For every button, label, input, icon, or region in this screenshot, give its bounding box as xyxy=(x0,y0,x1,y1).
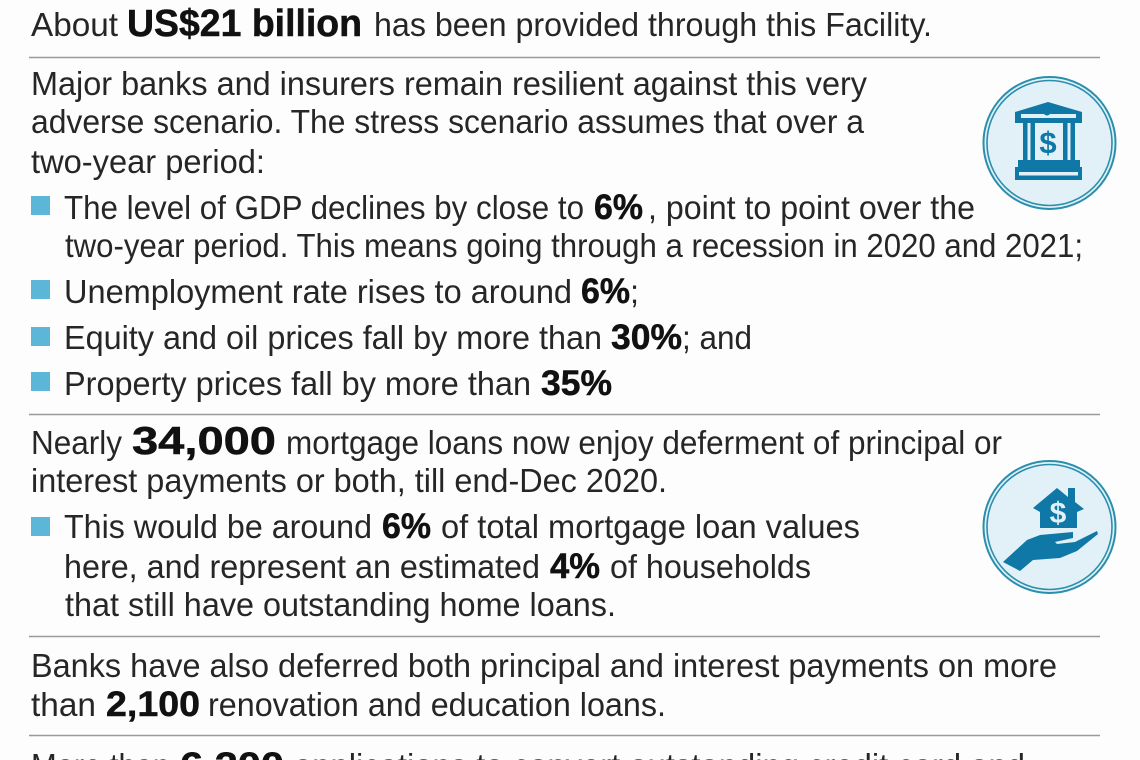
bullet: share of mortgage loans: here, and represent an estimated xyxy=(64,548,540,585)
text block: facility amount: has been provided through this Facility. xyxy=(374,6,932,43)
icon: hand holding house xyxy=(984,461,1116,593)
text block: mortgage deferment intro: interest payments or both, till end-Dec 2020. xyxy=(31,462,667,499)
bullet: GDP decline: 6% xyxy=(594,188,643,227)
bullet: equity and oil prices: ; and xyxy=(682,319,752,356)
text block: renovation and education loans: Banks have also deferred both principal and interest payments on more xyxy=(31,647,1057,684)
bullet: GDP decline: The level of GDP declines by close to xyxy=(64,189,584,226)
bullet: unemployment: ; xyxy=(630,273,639,310)
text block: stress scenario intro: two-year period: xyxy=(31,143,265,180)
bullet: share of mortgage loans: of households xyxy=(610,548,811,585)
bullet: GDP decline: two-year period. This means going through a recession in 2020 and 2021; xyxy=(65,227,1083,264)
bullet: GDP decline xyxy=(31,188,1083,264)
text block: renovation and education loans: renovation and education loans. xyxy=(208,686,666,723)
text block: facility amount: About xyxy=(31,6,118,43)
bullet: share of mortgage loans: 4% xyxy=(550,547,600,586)
icon: bank: $ xyxy=(1039,125,1057,160)
bullet: property prices: Property prices fall by more than xyxy=(64,365,531,402)
text block: facility amount xyxy=(31,3,932,45)
bullet: unemployment: Unemployment rate rises to around xyxy=(64,273,572,310)
bullet: share of mortgage loans: of total mortgage loan values xyxy=(441,508,860,545)
icon: bank xyxy=(984,77,1116,209)
text block: renovation and education loans: 2,100 xyxy=(106,685,200,724)
bullet: unemployment: 6% xyxy=(581,272,630,311)
bullet: equity and oil prices: Equity and oil prices fall by more than xyxy=(64,319,602,356)
text block: stress scenario intro: Major banks and insurers remain resilient against this very xyxy=(31,65,867,102)
text block: renovation and education loans xyxy=(31,647,1057,724)
text block: credit card conversion applications xyxy=(31,746,1025,760)
text block: renovation and education loans: than xyxy=(31,686,96,723)
bullet: share of mortgage loans: that still have outstanding home loans. xyxy=(65,586,616,623)
text block: stress scenario intro xyxy=(31,65,867,180)
bullet: property prices: 35% xyxy=(541,364,612,403)
panel: stress scenario xyxy=(31,65,1083,403)
text block: mortgage deferment intro xyxy=(31,420,1002,499)
bullet: share of mortgage loans: This would be around xyxy=(64,508,372,545)
panel: mortgage deferment xyxy=(31,420,1002,623)
icon: hand holding house: $ xyxy=(1050,497,1067,530)
bullet: equity and oil prices: 30% xyxy=(611,318,682,357)
text block: mortgage deferment intro: Nearly xyxy=(31,424,122,461)
text block: facility amount: US$21 billion xyxy=(127,3,362,45)
text block: stress scenario intro: adverse scenario. The stress scenario assumes that over a xyxy=(31,103,865,140)
bullet: share of mortgage loans xyxy=(31,507,860,623)
text block: mortgage deferment intro: mortgage loans now enjoy deferment of principal or xyxy=(286,424,1002,461)
bullet: share of mortgage loans: 6% xyxy=(382,507,431,546)
bullet: GDP decline: , point to point over the xyxy=(648,189,975,226)
text block: mortgage deferment intro: 34,000 xyxy=(132,420,276,463)
